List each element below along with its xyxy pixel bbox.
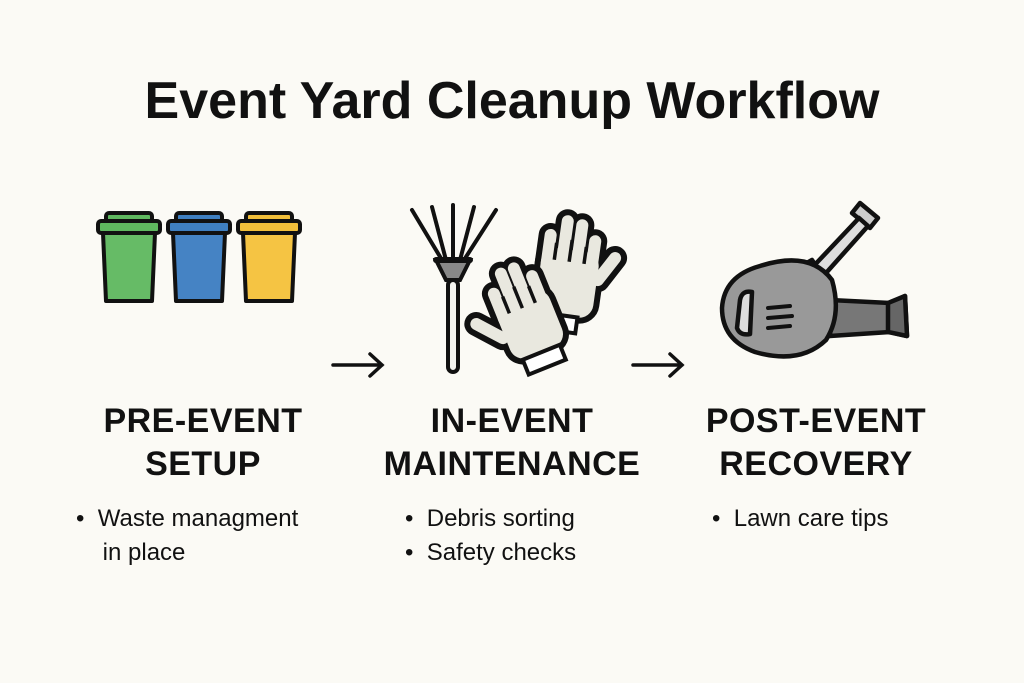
icon: gloves	[464, 209, 628, 378]
heading: pre-event: SETUP	[145, 445, 261, 483]
heading: pre-event	[103, 402, 303, 483]
heading: post-event: POST-EVENT	[706, 402, 926, 440]
front glove	[452, 255, 573, 389]
icon: leaf blower	[720, 200, 910, 359]
icon: waste bins	[96, 211, 302, 303]
bullets: pre-event: in place	[103, 539, 185, 566]
bullets: in-event	[405, 505, 576, 566]
bullets: post-event: • Lawn care tips	[712, 505, 888, 532]
bullets: in-event: • Safety checks	[405, 539, 576, 566]
icon: rake	[410, 203, 498, 374]
heading: pre-event: PRE-EVENT	[103, 402, 303, 440]
bullets: in-event: • Debris sorting	[405, 505, 575, 532]
heading: in-event	[384, 402, 640, 483]
back glove	[532, 212, 628, 339]
heading: post-event: RECOVERY	[719, 445, 913, 483]
arrow 2	[631, 352, 684, 378]
bullets: pre-event: • Waste managment	[76, 505, 298, 532]
bullets: pre-event	[76, 505, 298, 566]
heading: in-event: MAINTENANCE	[384, 445, 640, 483]
arrow 1	[331, 352, 384, 378]
heading: in-event: IN-EVENT	[431, 402, 593, 440]
heading: post-event	[706, 402, 926, 483]
title: Event Yard Cleanup Workflow	[145, 72, 879, 130]
